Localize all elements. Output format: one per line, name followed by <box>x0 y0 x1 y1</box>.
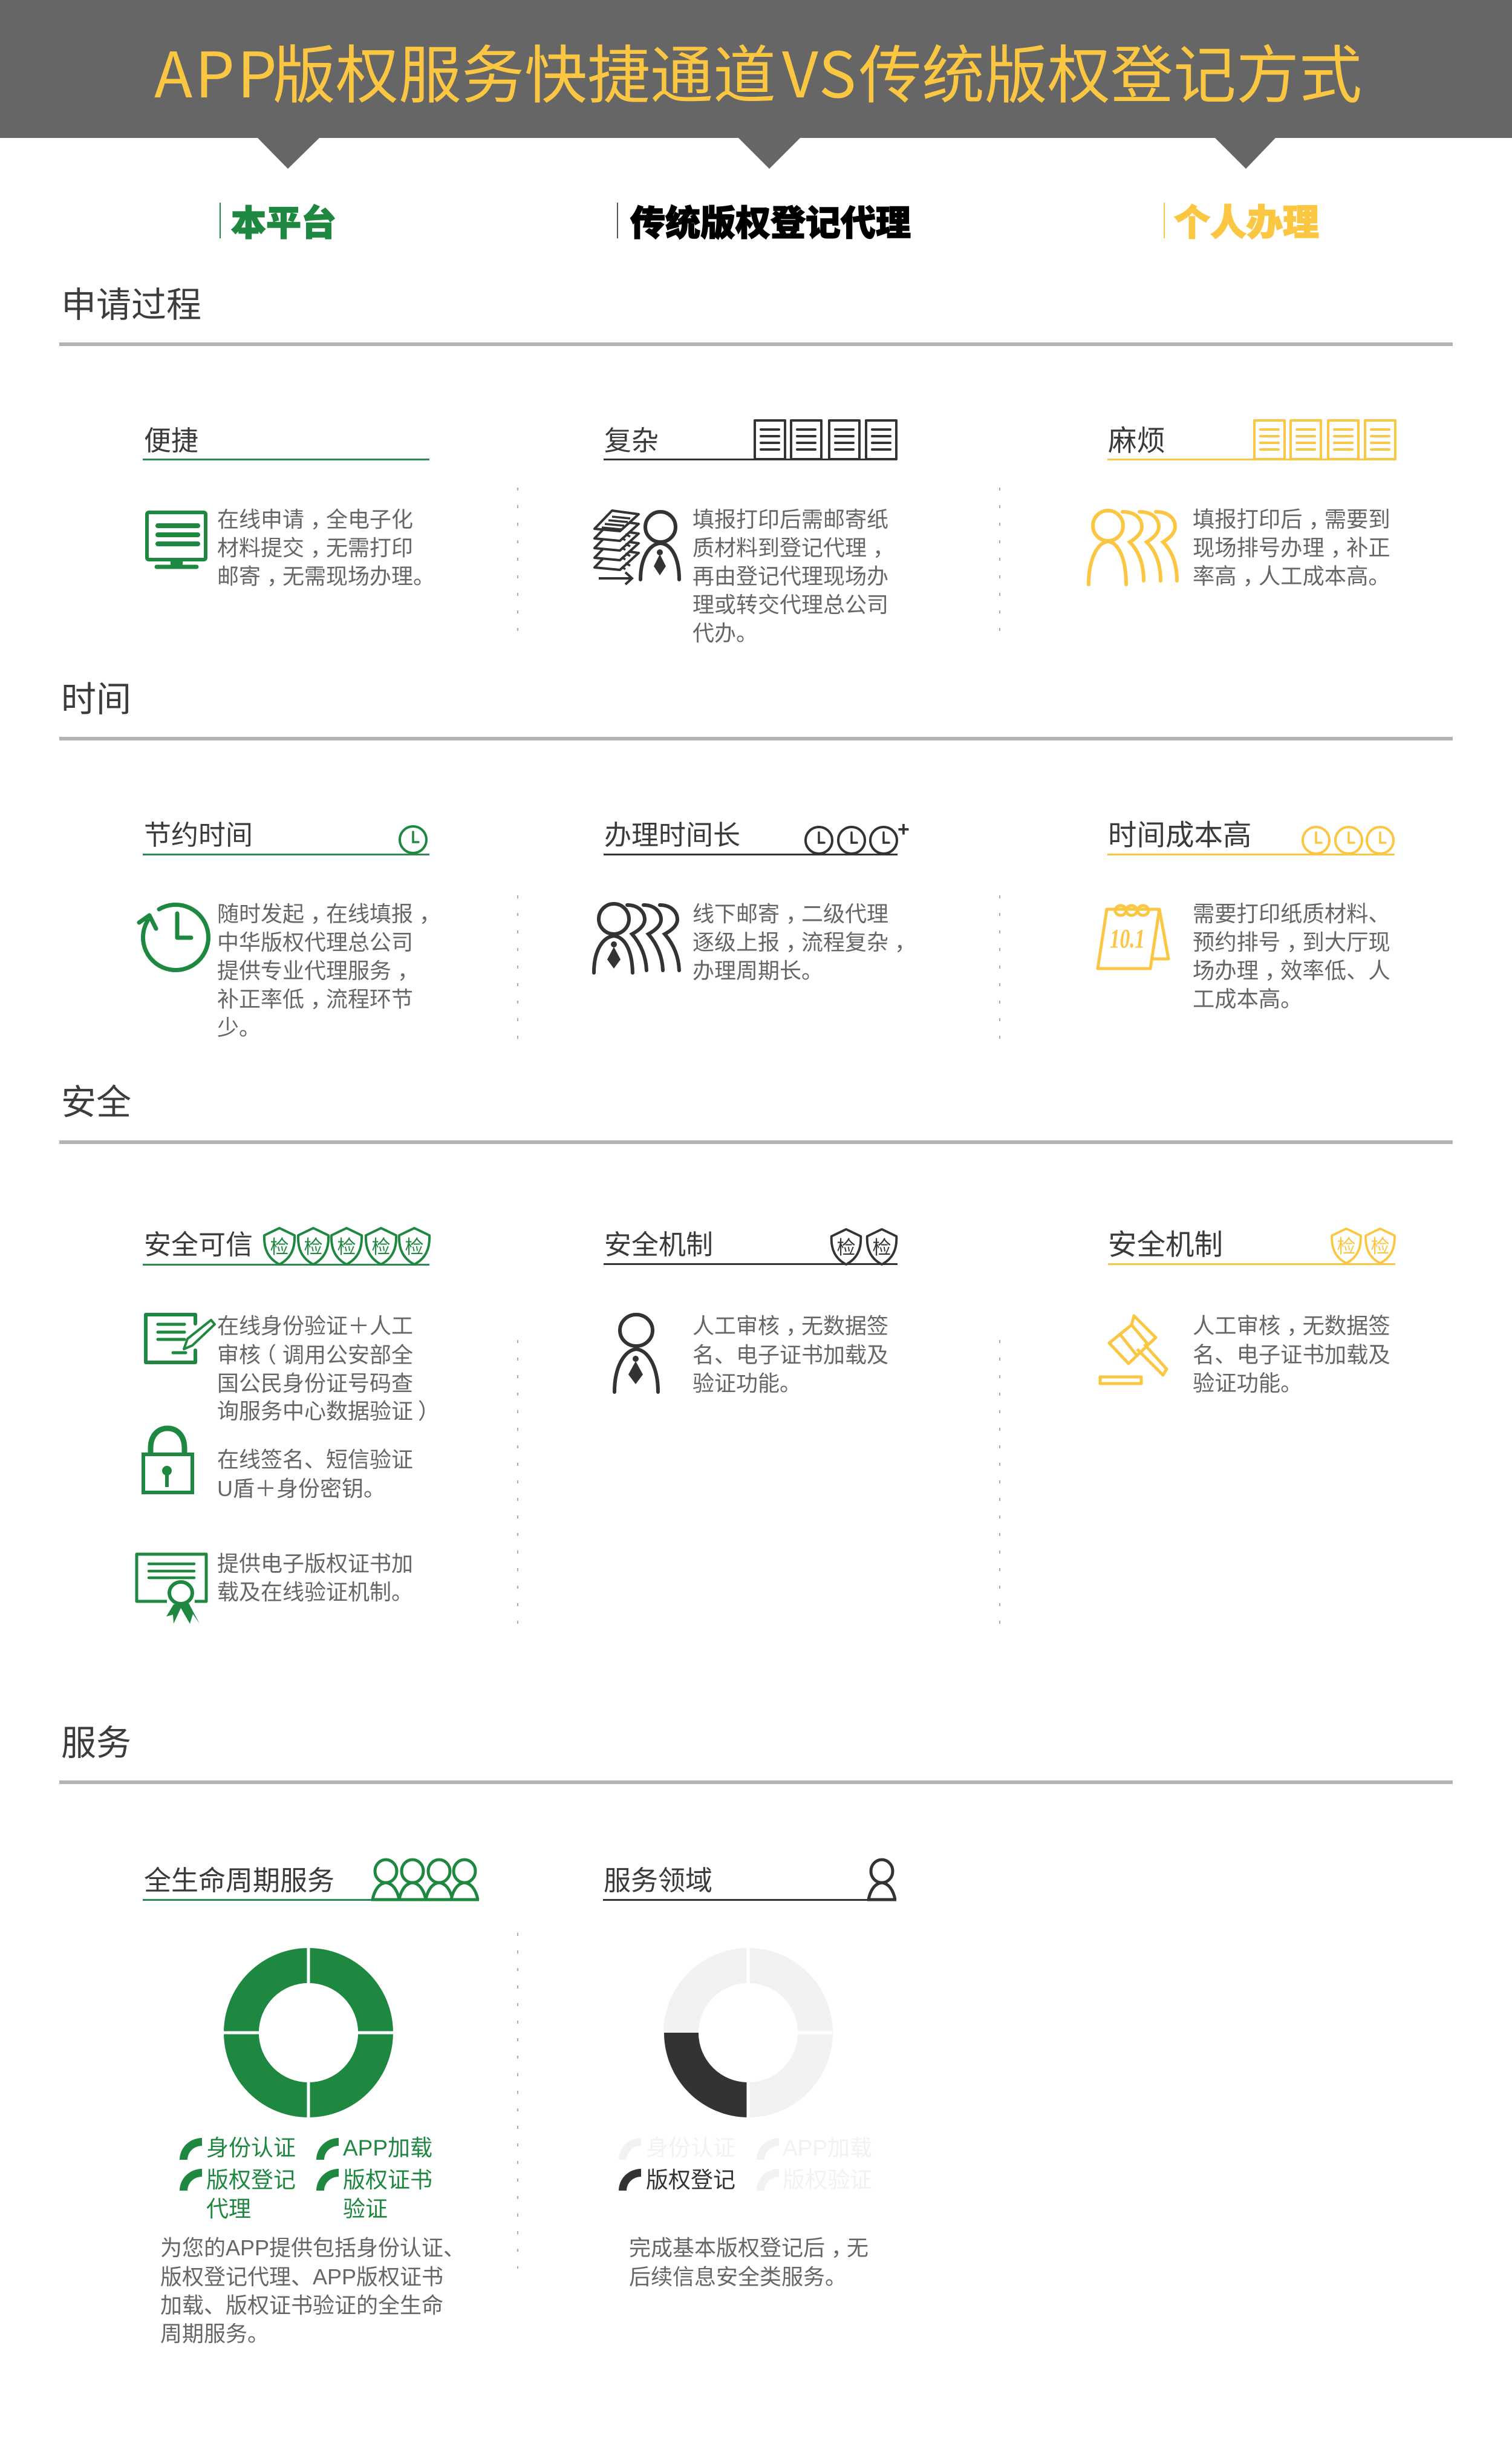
description: identity check: 国公民身份证号码查 <box>217 1371 413 1396</box>
description: certificate <box>217 1551 413 1604</box>
heading: long processing time: 办理时间长 <box>604 820 740 851</box>
description: 后续信息安全类服务。 <box>629 2264 847 2289</box>
description: signature: 在线签名、短信验证 <box>217 1447 413 1472</box>
heading: service scope <box>603 1860 896 1901</box>
description: 再由登记代理现场办 <box>692 564 888 589</box>
description: 填报打印后需邮寄纸 <box>692 507 888 532</box>
heading: security mechanism personal: 安全机制 <box>1108 1229 1223 1261</box>
description <box>692 901 916 983</box>
panel: security mechanism personal <box>1100 1229 1395 1396</box>
heading: secure and trusted: 检 <box>337 1237 356 1258</box>
section heading: security: 安全 <box>61 1083 131 1122</box>
donut chart: one service <box>664 1945 832 2120</box>
heading: security mechanism personal: 检 <box>1337 1236 1356 1257</box>
heading: security mechanism personal: 检 <box>1370 1236 1390 1257</box>
legend: 版权证书 <box>343 2168 432 2192</box>
description: 验证功能。 <box>1193 1371 1302 1396</box>
heading: security mechanism agent: 检 <box>872 1237 891 1258</box>
description <box>1193 1313 1390 1396</box>
description <box>1193 901 1390 1012</box>
section heading: security <box>59 1083 1453 1144</box>
icon: person with tie <box>614 1315 658 1392</box>
description: 提供专业代理服务 ， <box>217 958 419 983</box>
heading: convenient <box>143 425 429 460</box>
panel: saves time <box>139 820 441 1040</box>
icon: form and pen <box>146 1315 215 1362</box>
description <box>1193 507 1390 589</box>
description: certificate: 载及在线验证机制。 <box>217 1580 413 1604</box>
title: APP <box>154 24 279 116</box>
legend: 代理 <box>206 2197 251 2221</box>
heading: complex <box>604 420 897 460</box>
description: 场办理 ，效率低、人 <box>1193 958 1390 983</box>
panel: troublesome <box>1089 420 1396 589</box>
header band <box>0 0 1512 169</box>
icon: group with tie <box>594 904 679 973</box>
description: 材料提交 ，无需打印 <box>217 535 413 560</box>
legend: 版权登记 <box>646 2168 735 2192</box>
description: 工成本高。 <box>1193 987 1302 1012</box>
icon: certificate <box>137 1554 206 1624</box>
legend: 版权验证 <box>783 2168 872 2192</box>
description: 验证功能。 <box>692 1371 801 1396</box>
section heading: services <box>59 1724 1453 1784</box>
heading: security mechanism agent: 检 <box>837 1237 855 1258</box>
heading: saves time <box>143 820 429 855</box>
icon: clock with arrow <box>139 904 208 970</box>
panel: long processing time <box>594 818 916 983</box>
heading: service scope: 服务领域 <box>604 1865 712 1896</box>
description: 人工审核 ，无数据签 <box>692 1313 888 1338</box>
section heading: application process <box>59 286 1453 346</box>
description <box>692 507 894 646</box>
icon: desk calendar: 10.1 <box>1110 924 1145 953</box>
icon: monitor <box>147 512 206 567</box>
description: 预约排号 ，到大厅现 <box>1193 930 1390 955</box>
legend <box>180 2136 432 2221</box>
description: identity check: 审核（ 调用公安部全 <box>217 1342 413 1367</box>
icon: desk calendar <box>1098 906 1168 969</box>
heading: long processing time: + <box>898 818 910 841</box>
description <box>629 2235 868 2289</box>
heading: high time cost <box>1107 820 1395 855</box>
panel: security mechanism agent <box>604 1229 898 1396</box>
description: 填报打印后 ，需要到 <box>1193 507 1390 532</box>
legend: APP加载 <box>343 2136 432 2160</box>
description: 逐级上报 ，流程复杂 ， <box>692 930 916 955</box>
donut chart: four services <box>221 1945 396 2120</box>
heading: long processing time <box>604 818 910 855</box>
description: 理或转交代理总公司 <box>692 592 888 617</box>
heading: security mechanism agent: 安全机制 <box>604 1229 713 1260</box>
description: 补正率低 ，流程环节 <box>217 987 413 1012</box>
description: 少。 <box>217 1015 261 1040</box>
description: 邮寄 ，无需现场办理。 <box>217 564 435 589</box>
description: 中华版权代理总公司 <box>217 930 413 955</box>
heading: secure and trusted: 检 <box>304 1237 323 1258</box>
legend: APP加载 <box>783 2136 872 2160</box>
description: 版权登记代理、APP版权证书 <box>160 2264 443 2289</box>
column heading: platform: 本平台 <box>231 204 336 243</box>
description: 为您的APP提供包括身份认证、 <box>160 2235 465 2260</box>
heading: full lifecycle service: 全生命周期服务 <box>144 1865 334 1896</box>
description: identity check: 询服务中心数据验证） <box>217 1399 440 1423</box>
description: 周期服务。 <box>160 2321 269 2346</box>
heading: saves time: 节约时间 <box>144 820 253 851</box>
panel: secure and trusted <box>137 1228 440 1624</box>
title: VS <box>782 24 858 116</box>
icon: paper stack and person <box>595 511 679 584</box>
title: 传统版权登记方式 <box>859 24 1362 116</box>
section heading: time <box>59 680 1453 740</box>
heading: secure and trusted: 检 <box>405 1237 423 1258</box>
description: 在线申请 ，全电子化 <box>217 507 413 532</box>
description: 名、电子证书加载及 <box>692 1342 888 1367</box>
description: 完成基本版权登记后 ，无 <box>629 2235 868 2260</box>
description: 需要打印纸质材料、 <box>1193 901 1390 926</box>
description: 质材料到登记代理 ， <box>692 535 894 560</box>
heading: full lifecycle service <box>143 1860 479 1901</box>
description: certificate: 提供电子版权证书加 <box>217 1551 413 1576</box>
heading: security mechanism personal <box>1108 1229 1395 1265</box>
heading: complex: 复杂 <box>604 425 659 456</box>
icon: gavel <box>1100 1316 1167 1384</box>
description <box>217 507 435 589</box>
icon: padlock <box>143 1428 192 1492</box>
legend: 身份认证 <box>646 2136 735 2160</box>
description: 率高 ，人工成本高。 <box>1193 564 1390 589</box>
section heading: application process: 申请过程 <box>61 286 201 325</box>
legend: 身份认证 <box>206 2136 296 2160</box>
description: 办理周期长。 <box>692 958 823 983</box>
description: 现场排号办理 ，补正 <box>1193 535 1390 560</box>
heading: secure and trusted: 检 <box>270 1237 289 1258</box>
description: 名、电子证书加载及 <box>1193 1342 1390 1367</box>
heading: security mechanism agent <box>604 1229 898 1265</box>
description: 代办。 <box>692 621 758 646</box>
description <box>217 901 441 1040</box>
heading: convenient: 便捷 <box>144 425 198 456</box>
description: signature: U盾＋身份密钥。 <box>217 1476 385 1501</box>
description: identity check: 在线身份验证＋人工 <box>217 1313 413 1338</box>
heading: secure and trusted: 检 <box>371 1237 391 1258</box>
heading: troublesome <box>1107 420 1396 460</box>
description: 人工审核 ，无数据签 <box>1193 1313 1390 1338</box>
heading: high time cost: 时间成本高 <box>1108 820 1252 852</box>
panel: convenient <box>143 425 435 589</box>
description <box>160 2235 465 2346</box>
description: 线下邮寄 ，二级代理 <box>692 901 888 926</box>
heading: secure and trusted <box>143 1228 429 1266</box>
column heading: personal: 个人办理 <box>1174 203 1319 243</box>
title: 版权服务快捷通道 <box>273 24 776 116</box>
panel: high time cost <box>1098 820 1395 1012</box>
description: identity check <box>217 1313 440 1423</box>
heading: secure and trusted: 安全可信 <box>144 1229 253 1260</box>
column heading: traditional agent: 传统版权登记代理 <box>630 204 911 243</box>
heading: troublesome: 麻烦 <box>1108 425 1165 457</box>
description: 随时发起 ，在线填报 ， <box>217 901 441 926</box>
panel: complex <box>595 420 897 646</box>
description: signature <box>217 1447 413 1501</box>
panel: full lifecycle service <box>143 1860 479 2346</box>
section heading: time: 时间 <box>61 680 131 719</box>
legend: 验证 <box>343 2197 388 2221</box>
panel: service scope <box>603 1860 896 2289</box>
legend: 版权登记 <box>206 2168 296 2192</box>
description: 加载、版权证书验证的全生命 <box>160 2293 443 2318</box>
icon: queue of people <box>1089 511 1177 584</box>
description <box>692 1313 888 1396</box>
legend <box>619 2136 872 2192</box>
section heading: services: 服务 <box>61 1724 131 1763</box>
